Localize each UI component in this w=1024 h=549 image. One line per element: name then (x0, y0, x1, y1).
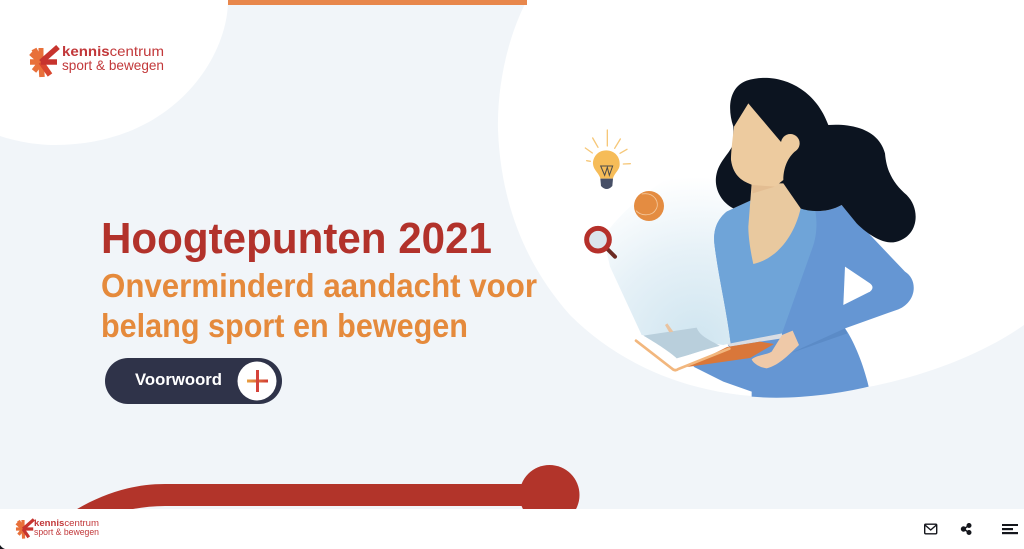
right white blob (498, 0, 1024, 397)
shirt front panel (714, 200, 816, 343)
footer logo text (34, 518, 99, 537)
book white pages (638, 337, 730, 368)
footer logo icon (16, 519, 34, 539)
bulb base (600, 179, 613, 189)
footer logo text: sport & bewegen (34, 527, 99, 537)
arm shadow (790, 328, 847, 353)
magnifier icon (587, 228, 615, 257)
book (636, 323, 782, 370)
bulb glass (593, 150, 620, 179)
ball (634, 191, 664, 221)
footer bar (0, 509, 1024, 549)
hair (716, 78, 916, 242)
bulb filament (601, 166, 613, 175)
white gap under arm (843, 267, 872, 305)
top-left white blob (0, 0, 228, 145)
subtitle line 1: Onverminderd aandacht voor (101, 267, 537, 304)
illustration: woman reading a book (585, 78, 916, 398)
subtitle line 2: belang sport en bewegen (101, 307, 468, 344)
pencil tip (665, 323, 673, 332)
book back pages (643, 328, 720, 358)
tennis ball icon (634, 191, 664, 221)
button: Voorwoord (105, 358, 282, 404)
book spine edge (636, 341, 729, 370)
menu icon (1002, 524, 1018, 534)
logo: kenniscentrum (30, 43, 164, 77)
footer logo text: kenniscentrum (34, 518, 99, 528)
body (693, 200, 914, 398)
button label: Voorwoord (135, 370, 222, 389)
face (731, 103, 797, 187)
top orange bar (228, 0, 527, 5)
mail icon (925, 524, 937, 534)
logo text (62, 43, 164, 73)
footer background (0, 509, 1024, 549)
light beam from book (603, 177, 757, 347)
book top edge (727, 333, 782, 347)
footer logo (16, 518, 99, 539)
magnifier lens (587, 228, 609, 251)
share icon (961, 524, 971, 534)
button plus icon (238, 362, 276, 400)
logo text: kenniscentrum (62, 43, 164, 59)
book orange cover (687, 342, 774, 367)
title: Hoogtepunten 2021 (101, 214, 492, 263)
red bar with circle (72, 465, 580, 525)
bottom-left corner mark (0, 545, 5, 549)
logo icon (30, 47, 58, 77)
neck shadow (752, 185, 775, 193)
ball seam (636, 194, 657, 215)
logo text: sport & bewegen (62, 57, 164, 73)
ear (781, 134, 800, 153)
bulb icon (585, 130, 630, 189)
hand (752, 331, 799, 368)
bulb rays (585, 130, 630, 164)
neck and chest (748, 183, 801, 264)
magnifier handle (607, 249, 615, 257)
button pill (105, 358, 282, 404)
